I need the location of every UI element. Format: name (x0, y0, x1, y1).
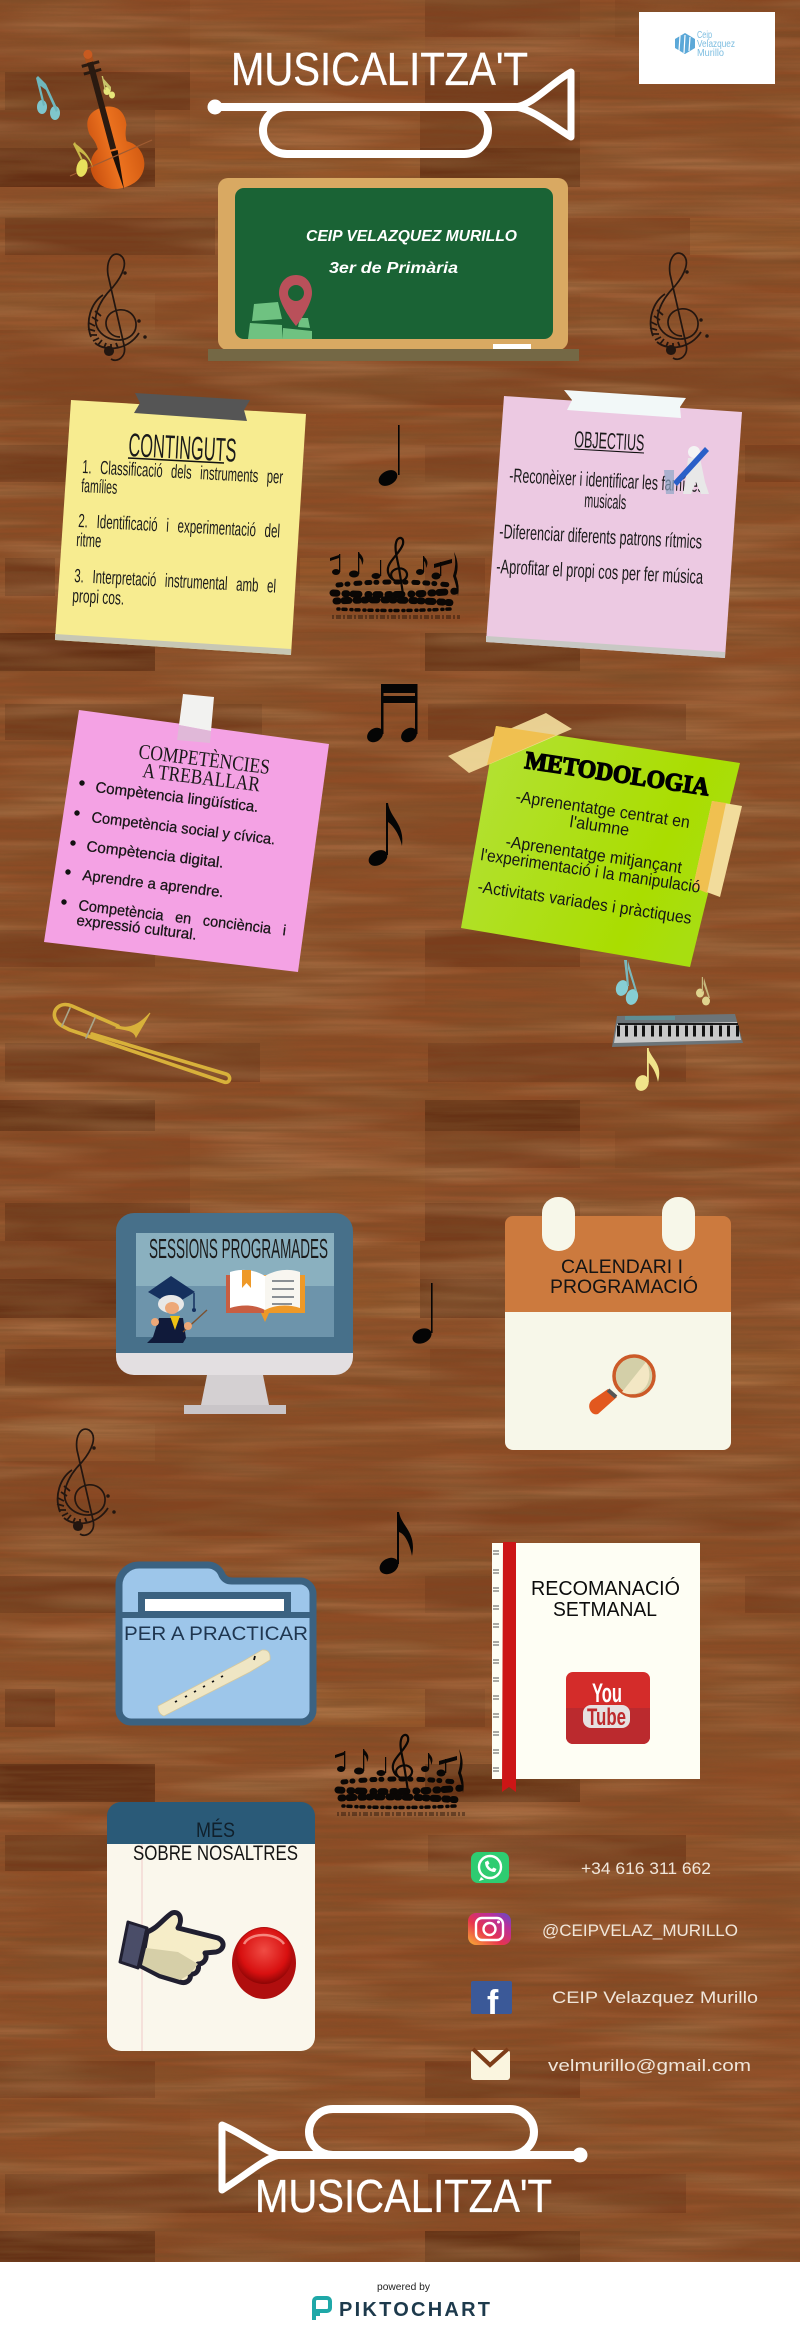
panel: objectius note (486, 390, 742, 658)
text block: continguts list: propi cos. (72, 586, 125, 610)
icon: facebook (471, 1981, 512, 2022)
heading: calendari: CALENDARI I (561, 1257, 683, 1278)
icon: yellow note lower (633, 1048, 659, 1093)
heading: competencies: COMPETÈNCIES (137, 739, 271, 779)
icon: beamed notes (364, 684, 420, 745)
title bottom: MUSICALITZA'T (255, 2170, 552, 2222)
contact email: velmurillo@gmail.com (548, 2056, 751, 2075)
heading: metodologia: METODOLOGIA (523, 747, 711, 801)
icon: piktochart logo (314, 2298, 330, 2320)
heading: competencies: A TREBALLAR (141, 758, 261, 796)
text block: objectius list: musicals (584, 490, 627, 514)
text block: continguts list: famílies (81, 476, 118, 499)
icon: trombone (54, 1005, 230, 1082)
text block: objectius list (496, 465, 705, 589)
heading: calendari: PROGRAMACIÓ (550, 1276, 698, 1298)
icon: blue note (36, 76, 60, 120)
panel: metodologia note (448, 713, 742, 967)
icon: red button (232, 1927, 296, 1999)
heading: mes: MÉS (196, 1819, 235, 1842)
contact instagram: @CEIPVELAZ_MURILLO (542, 1921, 738, 1940)
text block: competencies list: Compètencia digital. (86, 838, 225, 872)
footer (0, 2262, 800, 2342)
text block: continguts list: 2. Identificació i experimentació del (78, 511, 281, 543)
text block: competencies list: Compètencia lingüística. (95, 779, 259, 816)
panel: notebook (492, 1542, 700, 1792)
icon: pointing hand (120, 1912, 223, 1983)
icon: eighth note lower (377, 1512, 413, 1577)
board ledge (208, 349, 579, 361)
heading: objectius: OBJECTIUS (574, 426, 645, 456)
tape top-left (448, 713, 572, 773)
icon: keyboard (612, 1014, 743, 1047)
icon: quarter note middle (410, 1283, 434, 1347)
heading: calendari (550, 1257, 698, 1298)
text block: competencies list: Aprendre a aprendre. (82, 867, 225, 901)
icon: open book (226, 1270, 305, 1322)
powered by: powered by (377, 2281, 431, 2293)
panel: continguts note: CONTINGUTS (128, 426, 237, 469)
icon: whatsapp (471, 1852, 509, 1883)
contact facebook: CEIP Velazquez Murillo (552, 1988, 758, 2007)
logo text: Murillo (697, 48, 724, 59)
text block: competencies list: expressió cultural. (76, 912, 198, 944)
tape right (693, 801, 742, 897)
text block: continguts list: 1. Classificació dels instruments per (82, 457, 284, 489)
icon: facebook: f (487, 1984, 499, 2022)
panel: monitor: SESSIONS PROGRAMADES (149, 1233, 328, 1264)
red bookmark (502, 1542, 516, 1792)
tape white (564, 390, 686, 418)
icon: treble clef lower (57, 1429, 115, 1535)
chalkboard (208, 178, 579, 361)
text block: metodologia list: l'alumne (568, 812, 631, 840)
icon: professor (147, 1276, 207, 1343)
icon: blue note lower (614, 960, 640, 1006)
text block: continguts list: ritme (76, 530, 102, 552)
panel: monitor (116, 1213, 353, 1414)
chalk (493, 344, 531, 349)
contact phone: +34 616 311 662 (581, 1859, 711, 1878)
heading: recomanacio: SETMANAL (553, 1599, 657, 1621)
heading: continguts (128, 426, 237, 469)
text block: metodologia list (476, 787, 702, 928)
logo text (697, 30, 735, 59)
text block: competencies list: Competència social y cívica. (91, 809, 276, 849)
text block: metodologia list: -Aprenentatge mitjançant (504, 832, 684, 877)
heading: objectius (574, 426, 645, 456)
text block: metodologia list: -Activitats variades i pràctiques (476, 877, 693, 928)
text block: competencies list: Competència en conciència i (78, 897, 287, 939)
icon: bottom trumpet (222, 2109, 584, 2190)
panel: sobre nosaltres (107, 1802, 315, 2051)
icon: youtube: Tube (587, 1704, 626, 1731)
text block: competencies list (61, 779, 287, 944)
logo text: Ceip (697, 30, 712, 41)
icon: youtube: You (592, 1678, 622, 1708)
heading: recomanacio: RECOMANACIÓ (531, 1577, 680, 1600)
heading: sobre nosaltres: SOBRE NOSALTRES (133, 1842, 298, 1865)
icon: music notes cluster lower (335, 1735, 465, 1814)
panel: competencies note (44, 694, 329, 972)
icon: top trumpet (212, 72, 571, 154)
board title: CEIP VELAZQUEZ MURILLO (306, 228, 518, 245)
icon: mail (471, 2049, 510, 2080)
heading: recomanacio (531, 1577, 680, 1621)
text block: metodologia list: l'experimentació i la manipulació (479, 845, 702, 897)
icon: music notes cluster (330, 538, 460, 617)
icon: treble clef right (650, 253, 708, 359)
heading: competencies (137, 739, 271, 796)
text block: continguts list (72, 457, 284, 610)
icon: recorder (158, 1650, 270, 1716)
panel: calendar (505, 1197, 731, 1450)
calendar rings (542, 1197, 695, 1251)
tape translucent (177, 694, 214, 743)
icon: instagram (468, 1913, 511, 1945)
icon: eighth note (366, 803, 402, 869)
icon: youtube (566, 1672, 650, 1744)
icon: small yellow note (696, 977, 710, 1006)
panel: continguts note (55, 393, 306, 655)
logo card (639, 12, 775, 84)
board subtitle: 3er de Primària (329, 260, 458, 277)
heading: per a practicar: PER A PRACTICAR (124, 1624, 308, 1645)
text block: continguts list: 3. Interpretació instrumental amb el (74, 566, 277, 598)
folder paper (138, 1592, 291, 1612)
icon: yellow note small (102, 76, 115, 98)
text block: metodologia list: -Aprenentatge centrat en (514, 787, 691, 832)
icon: quarter note (376, 425, 400, 489)
icon: magnifying glass (589, 1356, 654, 1414)
logo text: Velazquez (697, 39, 735, 50)
title top: MUSICALITZA'T (231, 43, 528, 95)
icon: logo hexagon (675, 33, 695, 54)
icon: map and pin (248, 275, 312, 339)
icon: violin with notes (36, 43, 152, 197)
panel: folder (119, 1565, 313, 1722)
icon: figure with pen (664, 446, 709, 494)
icon: yellow note (73, 142, 93, 178)
tape dark (134, 393, 250, 421)
spiral marks (493, 1551, 499, 1771)
piktochart wordmark: PIKTOCHART (339, 2299, 490, 2321)
icon: treble clef left (88, 254, 146, 360)
